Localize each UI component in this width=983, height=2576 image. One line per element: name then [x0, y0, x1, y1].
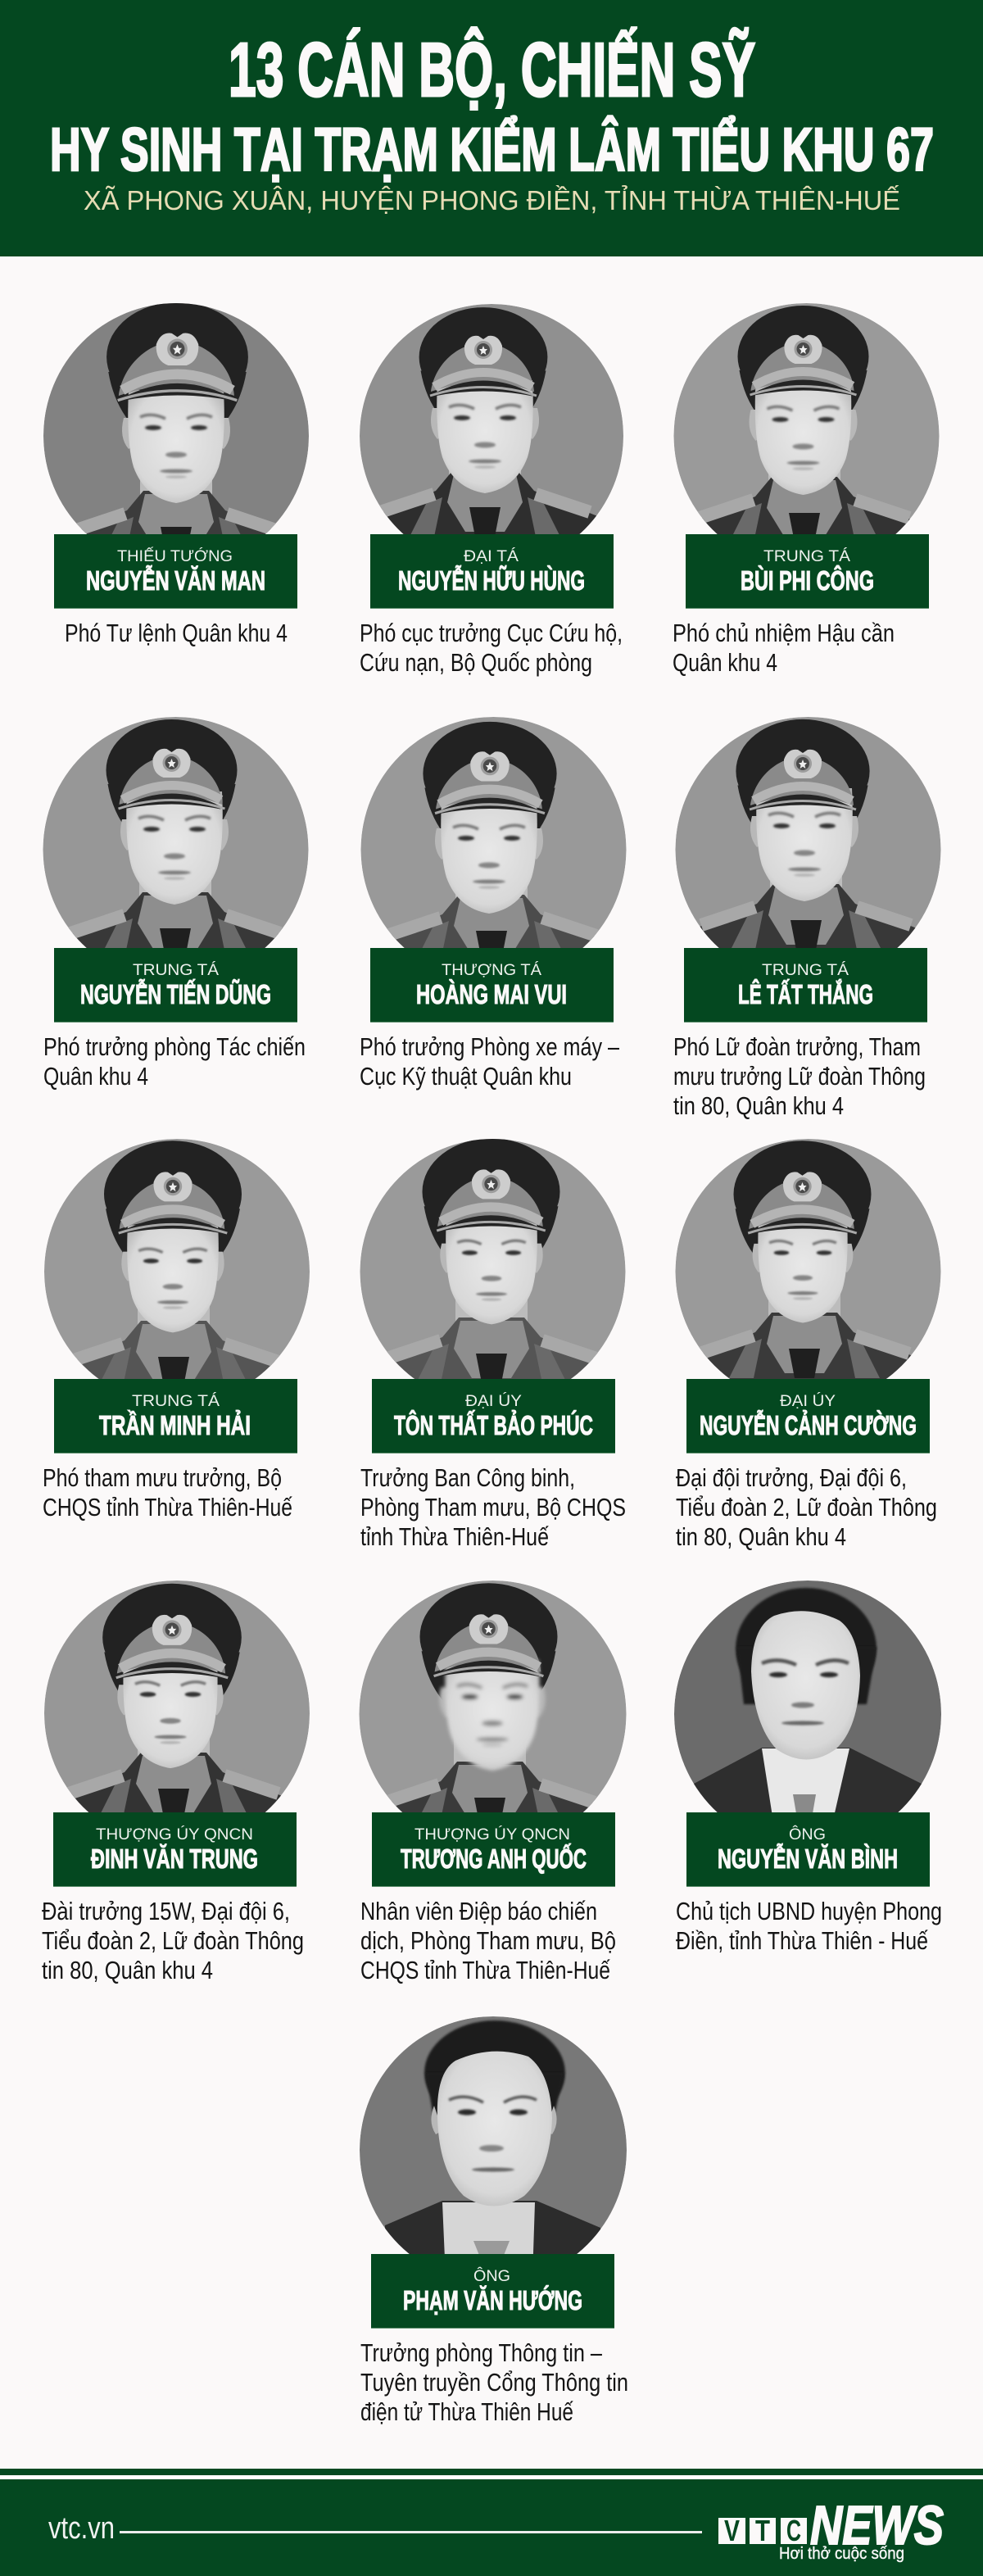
role description	[43, 1463, 292, 1522]
name label	[686, 534, 929, 609]
role description	[360, 619, 623, 677]
role description: CHQS tỉnh Thừa Thiên-Huế	[43, 1493, 292, 1522]
portrait	[360, 1139, 626, 1379]
name label: TRUNG TÁ	[133, 962, 219, 979]
role description: Phó cục trưởng Cục Cứu hộ,	[360, 619, 623, 647]
panel: Phạm Văn Hướng	[360, 2016, 628, 2426]
role description: Quân khu 4	[673, 648, 777, 677]
name label: ĐẠI ÚY	[465, 1392, 522, 1410]
name label: TRẦN MINH HẢI	[99, 1410, 251, 1440]
role description: Đài trưởng 15W, Đại đội 6,	[42, 1897, 290, 1925]
portrait	[675, 717, 940, 948]
panel: Trần Minh Hải	[30, 1139, 317, 1522]
role description: Quân khu 4	[43, 1062, 148, 1091]
role description: Tiểu đoàn 2, Lữ đoàn Thông	[42, 1926, 304, 1955]
role description	[673, 619, 895, 677]
name label	[372, 1379, 615, 1454]
role description: CHQS tỉnh Thừa Thiên-Huế	[360, 1956, 610, 1984]
role description	[360, 1897, 616, 1984]
name label: THƯỢNG ÚY QNCN	[96, 1825, 253, 1844]
name label: NGUYỄN HỮU HÙNG	[398, 565, 585, 596]
role description: Tuyên truyền Cổng Thông tin	[360, 2368, 628, 2397]
name label: TRƯƠNG ANH QUỐC	[401, 1843, 587, 1874]
role description: Phó chủ nhiệm Hậu cần	[673, 619, 895, 647]
role description	[676, 1463, 937, 1551]
name label: THƯỢNG TÁ	[442, 962, 541, 979]
name label	[684, 948, 927, 1023]
panel: Lê Tất Thắng	[663, 717, 949, 1120]
header banner	[0, 0, 983, 256]
role description: Phó trưởng Phòng xe máy –	[360, 1032, 620, 1061]
panel: Nguyễn Hữu Hùng	[342, 304, 628, 677]
role description	[42, 1897, 304, 1984]
name label: THƯỢNG ÚY QNCN	[414, 1825, 570, 1844]
panel: Tôn Thất Bảo Phúc	[348, 1138, 635, 1551]
name label: NGUYỄN TIẾN DŨNG	[80, 979, 271, 1009]
role description: Điền, tỉnh Thừa Thiên - Huế	[676, 1926, 928, 1955]
name label: TÔN THẤT BẢO PHÚC	[394, 1409, 593, 1440]
panel: Nguyễn Tiến Dũng	[32, 717, 319, 1091]
role description	[360, 1463, 626, 1551]
role description: Phó Tư lệnh Quân khu 4	[65, 619, 288, 647]
role description: điện tử Thừa Thiên Huế	[360, 2397, 573, 2426]
role description: Đại đội trưởng, Đại đội 6,	[676, 1463, 907, 1492]
portrait	[360, 304, 623, 534]
icon: VTC News logo: NEWS	[810, 2495, 944, 2556]
name label: NGUYỄN VĂN MAN	[86, 565, 265, 596]
panel: Nguyễn Văn Bình	[674, 1581, 942, 1955]
name label	[372, 1812, 615, 1887]
name label: TRUNG TÁ	[762, 962, 849, 979]
name label: ÔNG	[473, 2267, 510, 2285]
role description: Trưởng phòng Thông tin –	[360, 2338, 603, 2367]
panel: Đinh Văn Trung	[30, 1581, 317, 1984]
name label	[54, 948, 297, 1023]
name label	[54, 534, 297, 609]
panel: Trương Anh Quốc	[347, 1581, 633, 1984]
portrait	[359, 1581, 626, 1812]
role description	[360, 1032, 620, 1091]
name label: ĐẠI TÁ	[464, 548, 519, 565]
name label	[686, 1812, 930, 1887]
name label	[686, 1379, 930, 1454]
name label	[54, 1379, 297, 1454]
name label: PHẠM VĂN HƯỚNG	[403, 2285, 582, 2315]
role description: Phòng Tham mưu, Bộ CHQS	[360, 1493, 626, 1522]
role description: tin 80, Quân khu 4	[42, 1956, 213, 1984]
panel: Nguyễn Cảnh Cường	[661, 1139, 948, 1551]
name label: ĐẠI ÚY	[780, 1392, 836, 1410]
icon: VTC News logo: C	[786, 2514, 801, 2547]
name label: TRUNG TÁ	[132, 1393, 220, 1410]
name label: THIẾU TƯỚNG	[117, 547, 233, 565]
role description	[676, 1897, 942, 1955]
name label: ÔNG	[789, 1825, 826, 1844]
subtitle location: XÃ PHONG XUÂN, HUYỆN PHONG ĐIỀN, TỈNH THỪA THIÊN-HUẾ	[84, 185, 900, 215]
name label	[371, 2254, 614, 2329]
icon: VTC News logo: V	[724, 2514, 740, 2547]
role description: tin 80, Quân khu 4	[676, 1522, 846, 1551]
portrait	[360, 2016, 627, 2254]
site address: vtc.vn	[48, 2511, 115, 2546]
name label	[53, 1812, 297, 1887]
portrait	[360, 717, 626, 948]
role description: Nhân viên Điệp báo chiến	[360, 1897, 597, 1925]
name label: ĐINH VĂN TRUNG	[91, 1844, 258, 1874]
role description	[673, 1032, 926, 1120]
name label: LÊ TẤT THẮNG	[738, 979, 873, 1009]
role description: Trưởng Ban Công binh,	[360, 1463, 575, 1492]
role description: Cứu nạn, Bộ Quốc phòng	[360, 648, 592, 677]
role description	[360, 2338, 628, 2426]
footer	[0, 2469, 983, 2576]
name label: TRUNG TÁ	[763, 548, 850, 565]
portrait	[44, 1581, 310, 1812]
role description: mưu trưởng Lữ đoàn Thông	[673, 1062, 926, 1091]
portrait	[44, 1139, 310, 1379]
icon: VTC News logo: T	[755, 2514, 770, 2547]
name label: HOÀNG MAI VUI	[416, 979, 567, 1009]
role description: Phó trưởng phòng Tác chiến	[43, 1032, 306, 1061]
icon: VTC News logo: Hơi thở cuộc sống	[779, 2545, 904, 2563]
portrait	[43, 717, 308, 948]
role description	[43, 1032, 306, 1091]
role description: dịch, Phòng Tham mưu, Bộ	[360, 1926, 616, 1955]
name label: NGUYỄN VĂN BÌNH	[718, 1844, 898, 1874]
panel: Bùi Phi Công	[661, 303, 948, 677]
icon: VTC News logo	[718, 2495, 944, 2563]
role description: tỉnh Thừa Thiên-Huế	[360, 1522, 549, 1551]
name label	[370, 534, 614, 609]
name label	[370, 948, 614, 1023]
name label: BÙI PHI CÔNG	[741, 565, 874, 596]
role description: Phó Lữ đoàn trưởng, Tham	[673, 1032, 921, 1061]
portrait	[43, 303, 309, 534]
panel: Hoàng Mai Vui	[348, 717, 635, 1091]
role description: tin 80, Quân khu 4	[673, 1091, 844, 1120]
panel: Nguyễn Văn Man	[33, 302, 319, 647]
portrait	[674, 1581, 941, 1812]
role description: Cục Kỹ thuật Quân khu	[360, 1062, 572, 1091]
portrait	[673, 303, 939, 534]
role description: Phó tham mưu trưởng, Bộ	[43, 1463, 282, 1492]
portrait	[675, 1139, 940, 1379]
